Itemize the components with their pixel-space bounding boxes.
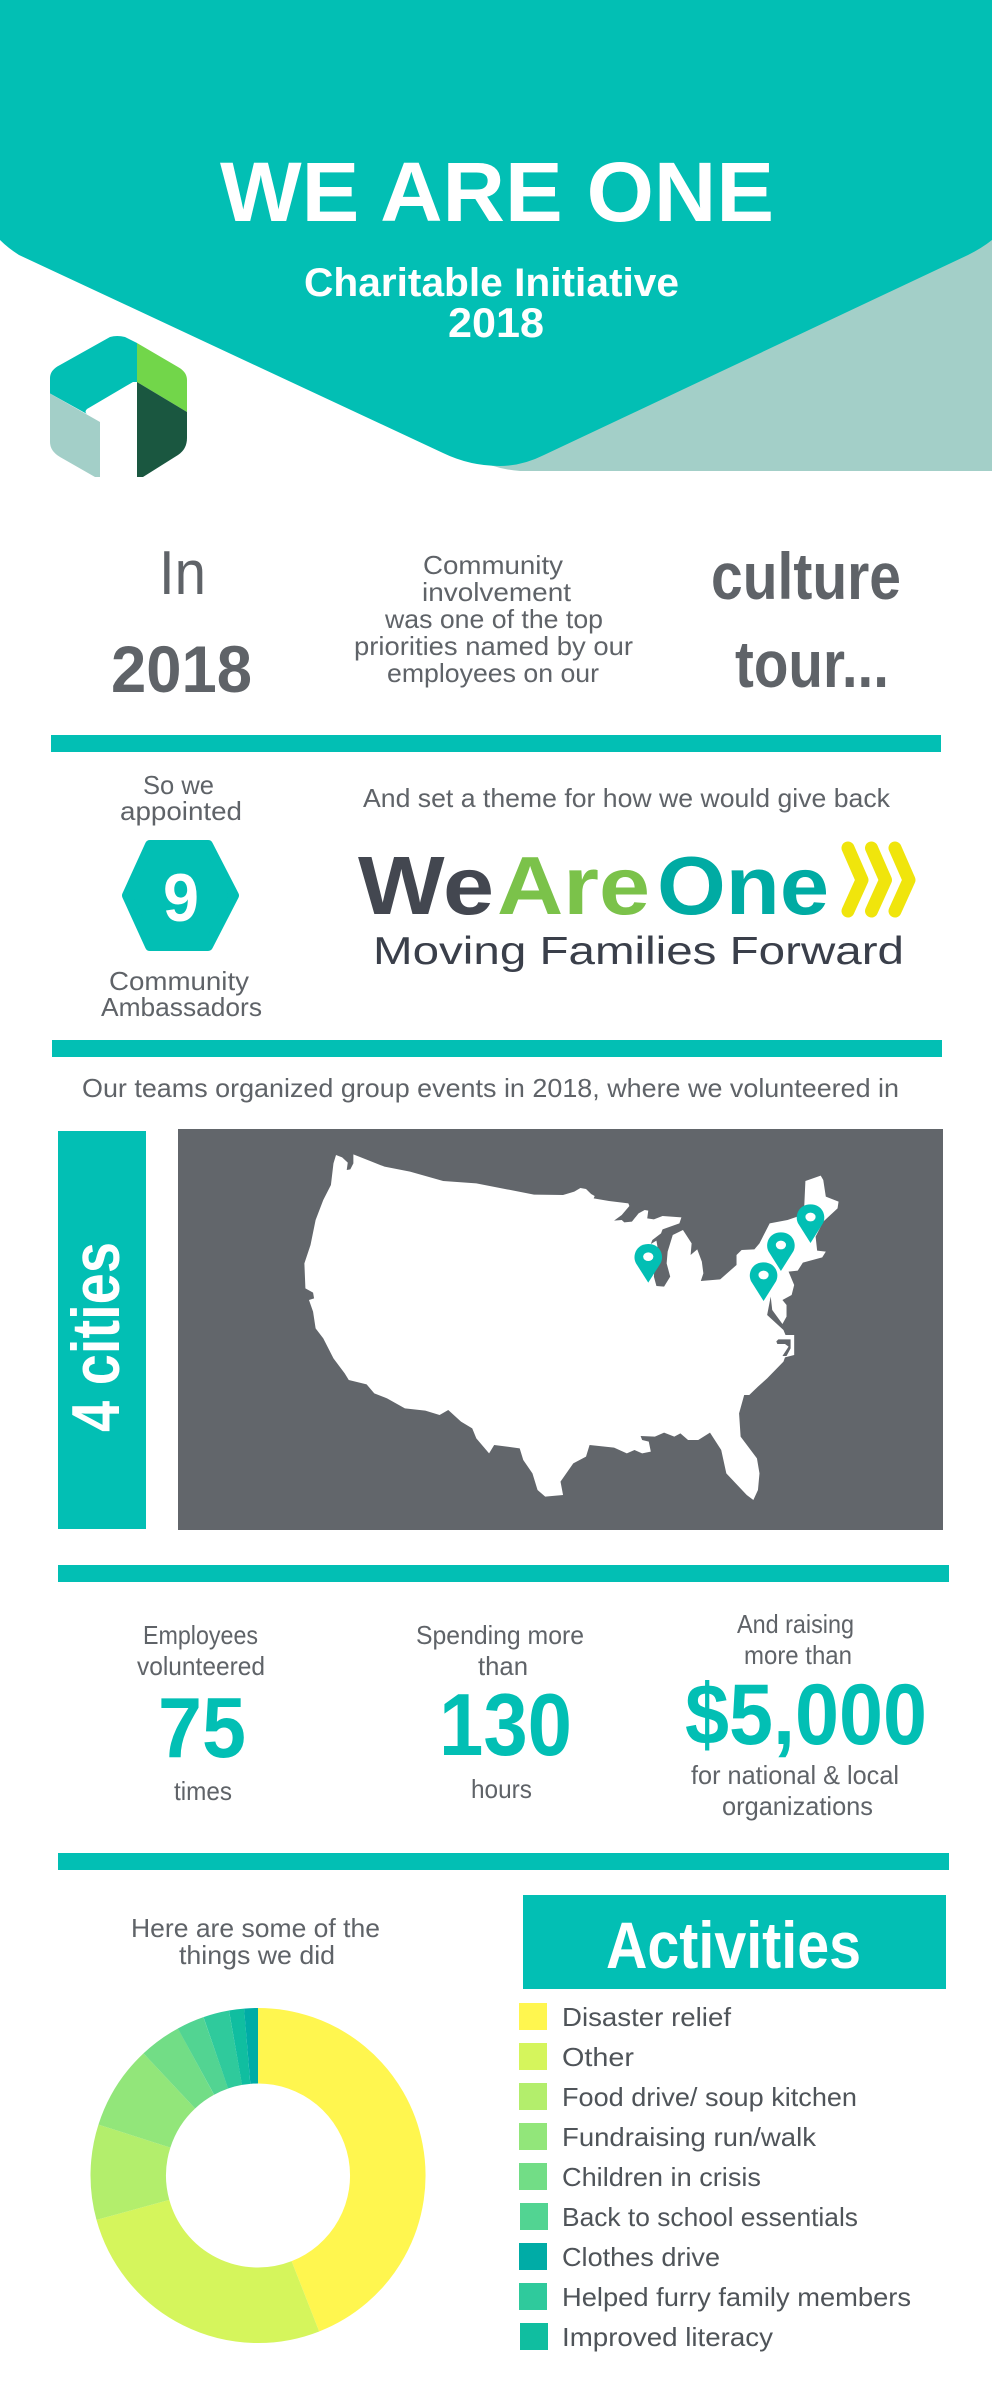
text: group events: Our teams organized group events in 2018, where we volunteered in (82, 1073, 899, 1103)
text: In 2018: 2018 (111, 632, 252, 706)
text: culture tour: tour... (735, 627, 889, 701)
stat: $5,000 raised: And raising (737, 1609, 854, 1639)
text: community ambassadors (101, 966, 262, 1022)
text: so we appointed: So we (143, 770, 214, 800)
legend: Other: Other (562, 2042, 634, 2072)
legend: Children in crisis: Children in crisis (562, 2162, 761, 2192)
panel: ambassadors (101, 770, 262, 1022)
logo: We Are One: Moving Families Forward (373, 930, 904, 973)
text: things we did (131, 1913, 380, 1970)
donut chart (128, 2046, 388, 2305)
logo: We Are One (358, 839, 909, 973)
logo: We Are One: We (358, 839, 494, 932)
panel: US map (178, 1129, 943, 1530)
text: so we appointed: appointed (120, 796, 242, 826)
heading: Activities: Activities (606, 1908, 861, 1982)
legend: Helped furry family members: Helped furry family members (562, 2282, 911, 2312)
text: In 2018: In (159, 539, 206, 608)
text: culture tour (711, 539, 901, 701)
stat: $5,000 raised: for national & local (691, 1760, 899, 1790)
text: community ambassadors: Community (109, 966, 249, 996)
pale corner shape (490, 240, 992, 471)
stat: 130 hours: than (478, 1651, 528, 1681)
icon: hexagon with 9 (127, 845, 234, 946)
stat: $5,000 raised: more than (744, 1640, 852, 1670)
legend: Back to school: Back to school essentials (562, 2202, 858, 2232)
legend: Other (519, 2042, 634, 2072)
logo: We Are One: One (657, 839, 829, 932)
text: set a theme: And set a theme for how we would give back (363, 783, 891, 813)
map: United States (304, 1154, 839, 1500)
stat: 75 times (137, 1620, 265, 1806)
stat: 130 hours: Spending more (416, 1620, 584, 1650)
subtitle: Charitable Initiative (304, 261, 679, 305)
icon: map pin (750, 1262, 777, 1301)
text: so we appointed (120, 770, 242, 826)
panel: 4 cities (58, 1131, 146, 1529)
icon: hexagon with 9: 9 (163, 860, 199, 936)
legend: Improved literacy: Improved literacy (562, 2322, 773, 2352)
icon: map pin (767, 1232, 795, 1271)
icon: map pin (797, 1204, 824, 1243)
text: community involvement: was one of the top (384, 604, 603, 634)
stat: 75 times: 75 (158, 1681, 246, 1776)
header banner (0, 0, 992, 471)
legend: Clothes drive: Clothes drive (562, 2242, 720, 2272)
text: community ambassadors: Ambassadors (101, 992, 262, 1022)
stat: 75 times: times (174, 1776, 232, 1806)
stat: $5,000 raised: $5,000 (685, 1667, 927, 1763)
text: community involvement: employees on our (387, 658, 599, 688)
text: In 2018 (111, 539, 252, 706)
text: things we did: things we did (179, 1940, 335, 1970)
text: culture tour: culture (711, 539, 901, 613)
icon: map pin (634, 1244, 662, 1283)
icon: company logo (50, 336, 187, 477)
stat: 75 times: volunteered (137, 1651, 265, 1681)
stat: 130 hours: 130 (439, 1675, 572, 1774)
legend: Fundraising: Fundraising run/walk (562, 2122, 817, 2152)
legend (519, 2002, 911, 2352)
text: community involvement: involvement (422, 577, 572, 607)
logo: We Are One: Are (497, 839, 650, 932)
stat: 130 hours: hours (471, 1774, 532, 1804)
panel: 4 cities: 4 cities (58, 1242, 134, 1432)
teal pennant (0, 0, 992, 466)
title: WE ARE ONE (220, 145, 774, 239)
text: things we did: Here are some of the (131, 1913, 380, 1943)
stat: 75 times: Employees (143, 1620, 258, 1650)
legend: Food drive: Food drive/ soup kitchen (562, 2082, 857, 2112)
subtitle: 2018 (448, 299, 544, 346)
stat: 130 hours (416, 1620, 584, 1804)
stat: $5,000 raised (685, 1609, 927, 1821)
icon: yellow chevrons (848, 848, 909, 911)
stat: $5,000 raised: organizations (722, 1791, 873, 1821)
text: community involvement: Community (423, 550, 563, 580)
legend: Disaster relief: Disaster relief (562, 2002, 732, 2032)
heading: Activities (523, 1895, 946, 1989)
text: community involvement (354, 550, 633, 688)
subtitle (304, 261, 679, 346)
text: community involvement: priorities named by our (354, 631, 633, 661)
